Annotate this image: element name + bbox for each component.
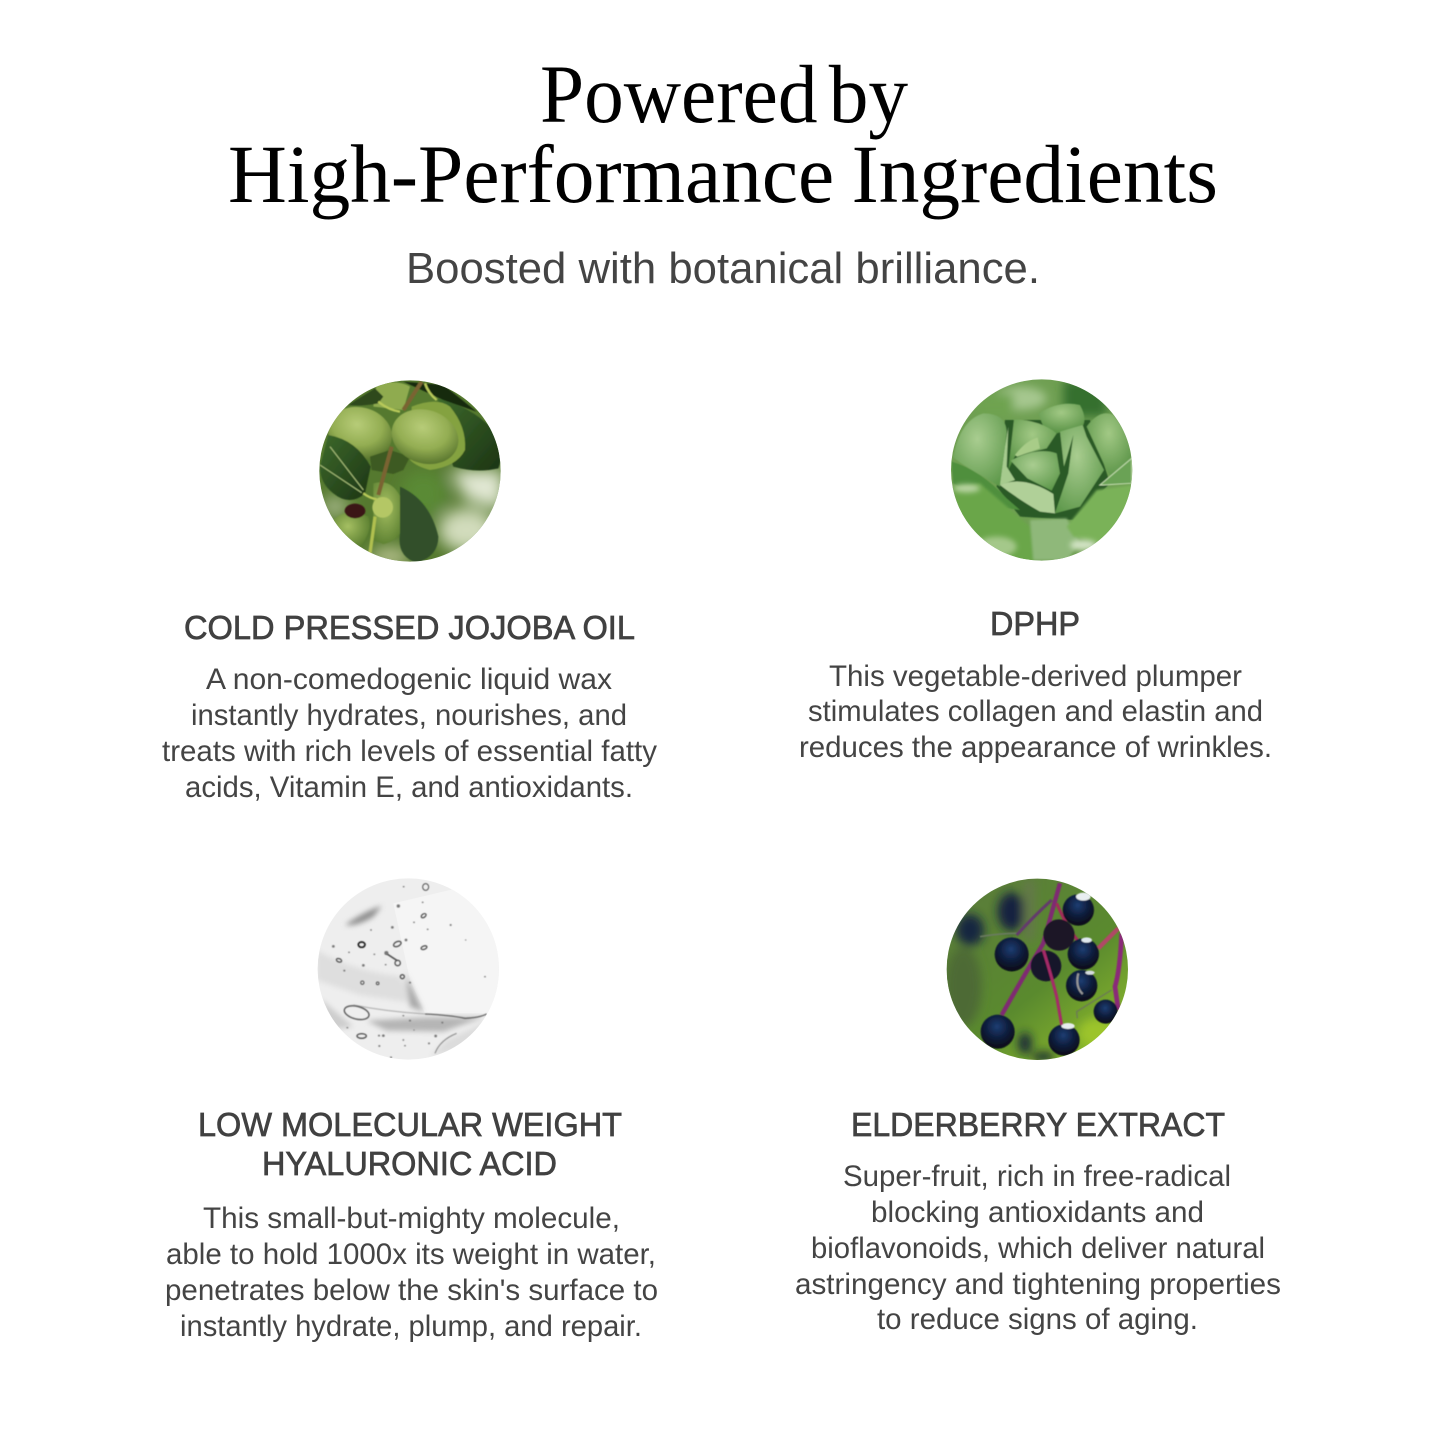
- icon: lettuce photo: [947, 377, 1137, 567]
- description: acids, Vitamin E, and antioxidants.: [185, 771, 633, 804]
- heading: ELDERBERRY EXTRACT: [851, 1106, 1225, 1143]
- description: stimulates collagen and elastin and: [808, 695, 1263, 728]
- description: blocking antioxidants and: [871, 1196, 1204, 1229]
- description: A non-comedogenic liquid wax: [206, 663, 612, 696]
- description: treats with rich levels of essential fatty: [162, 735, 657, 768]
- description: able to hold 1000x its weight in water,: [166, 1238, 656, 1271]
- description: This small-but-mighty molecule,: [203, 1202, 620, 1235]
- panel: cold pressed jojoba oil: [162, 377, 657, 804]
- description: [799, 660, 1272, 764]
- description: [795, 1160, 1281, 1336]
- heading: HYALURONIC ACID: [262, 1145, 557, 1182]
- description: instantly hydrates, nourishes, and: [191, 699, 627, 732]
- description: reduces the appearance of wrinkles.: [799, 731, 1272, 764]
- icon: gel texture photo: [317, 877, 507, 1067]
- description: to reduce signs of aging.: [877, 1303, 1198, 1336]
- icon: jojoba fruit photo: [317, 377, 507, 567]
- panel: low molecular weight hyaluronic acid: [165, 877, 658, 1343]
- description: instantly hydrate, plump, and repair.: [180, 1310, 642, 1343]
- description: [165, 1202, 658, 1343]
- panel: DPHP: [799, 377, 1272, 764]
- description: Super-fruit, rich in free-radical: [843, 1160, 1231, 1193]
- subtitle: Boosted with botanical brilliance.: [406, 244, 1040, 293]
- description: bioflavonoids, which deliver natural: [811, 1232, 1265, 1265]
- heading: COLD PRESSED JOJOBA OIL: [184, 609, 635, 646]
- description: [162, 663, 657, 804]
- title: Powered by: [540, 48, 908, 140]
- icon: elderberry photo: [945, 877, 1137, 1067]
- description: penetrates below the skin's surface to: [165, 1274, 658, 1307]
- title: High-Performance Ingredients: [228, 128, 1218, 220]
- heading: DPHP: [990, 605, 1080, 642]
- heading: [198, 1106, 622, 1182]
- description: astringency and tightening properties: [795, 1268, 1281, 1301]
- description: This vegetable-derived plumper: [829, 660, 1242, 693]
- panel: elderberry extract: [795, 877, 1281, 1336]
- title: [228, 48, 1218, 220]
- heading: LOW MOLECULAR WEIGHT: [198, 1106, 622, 1143]
